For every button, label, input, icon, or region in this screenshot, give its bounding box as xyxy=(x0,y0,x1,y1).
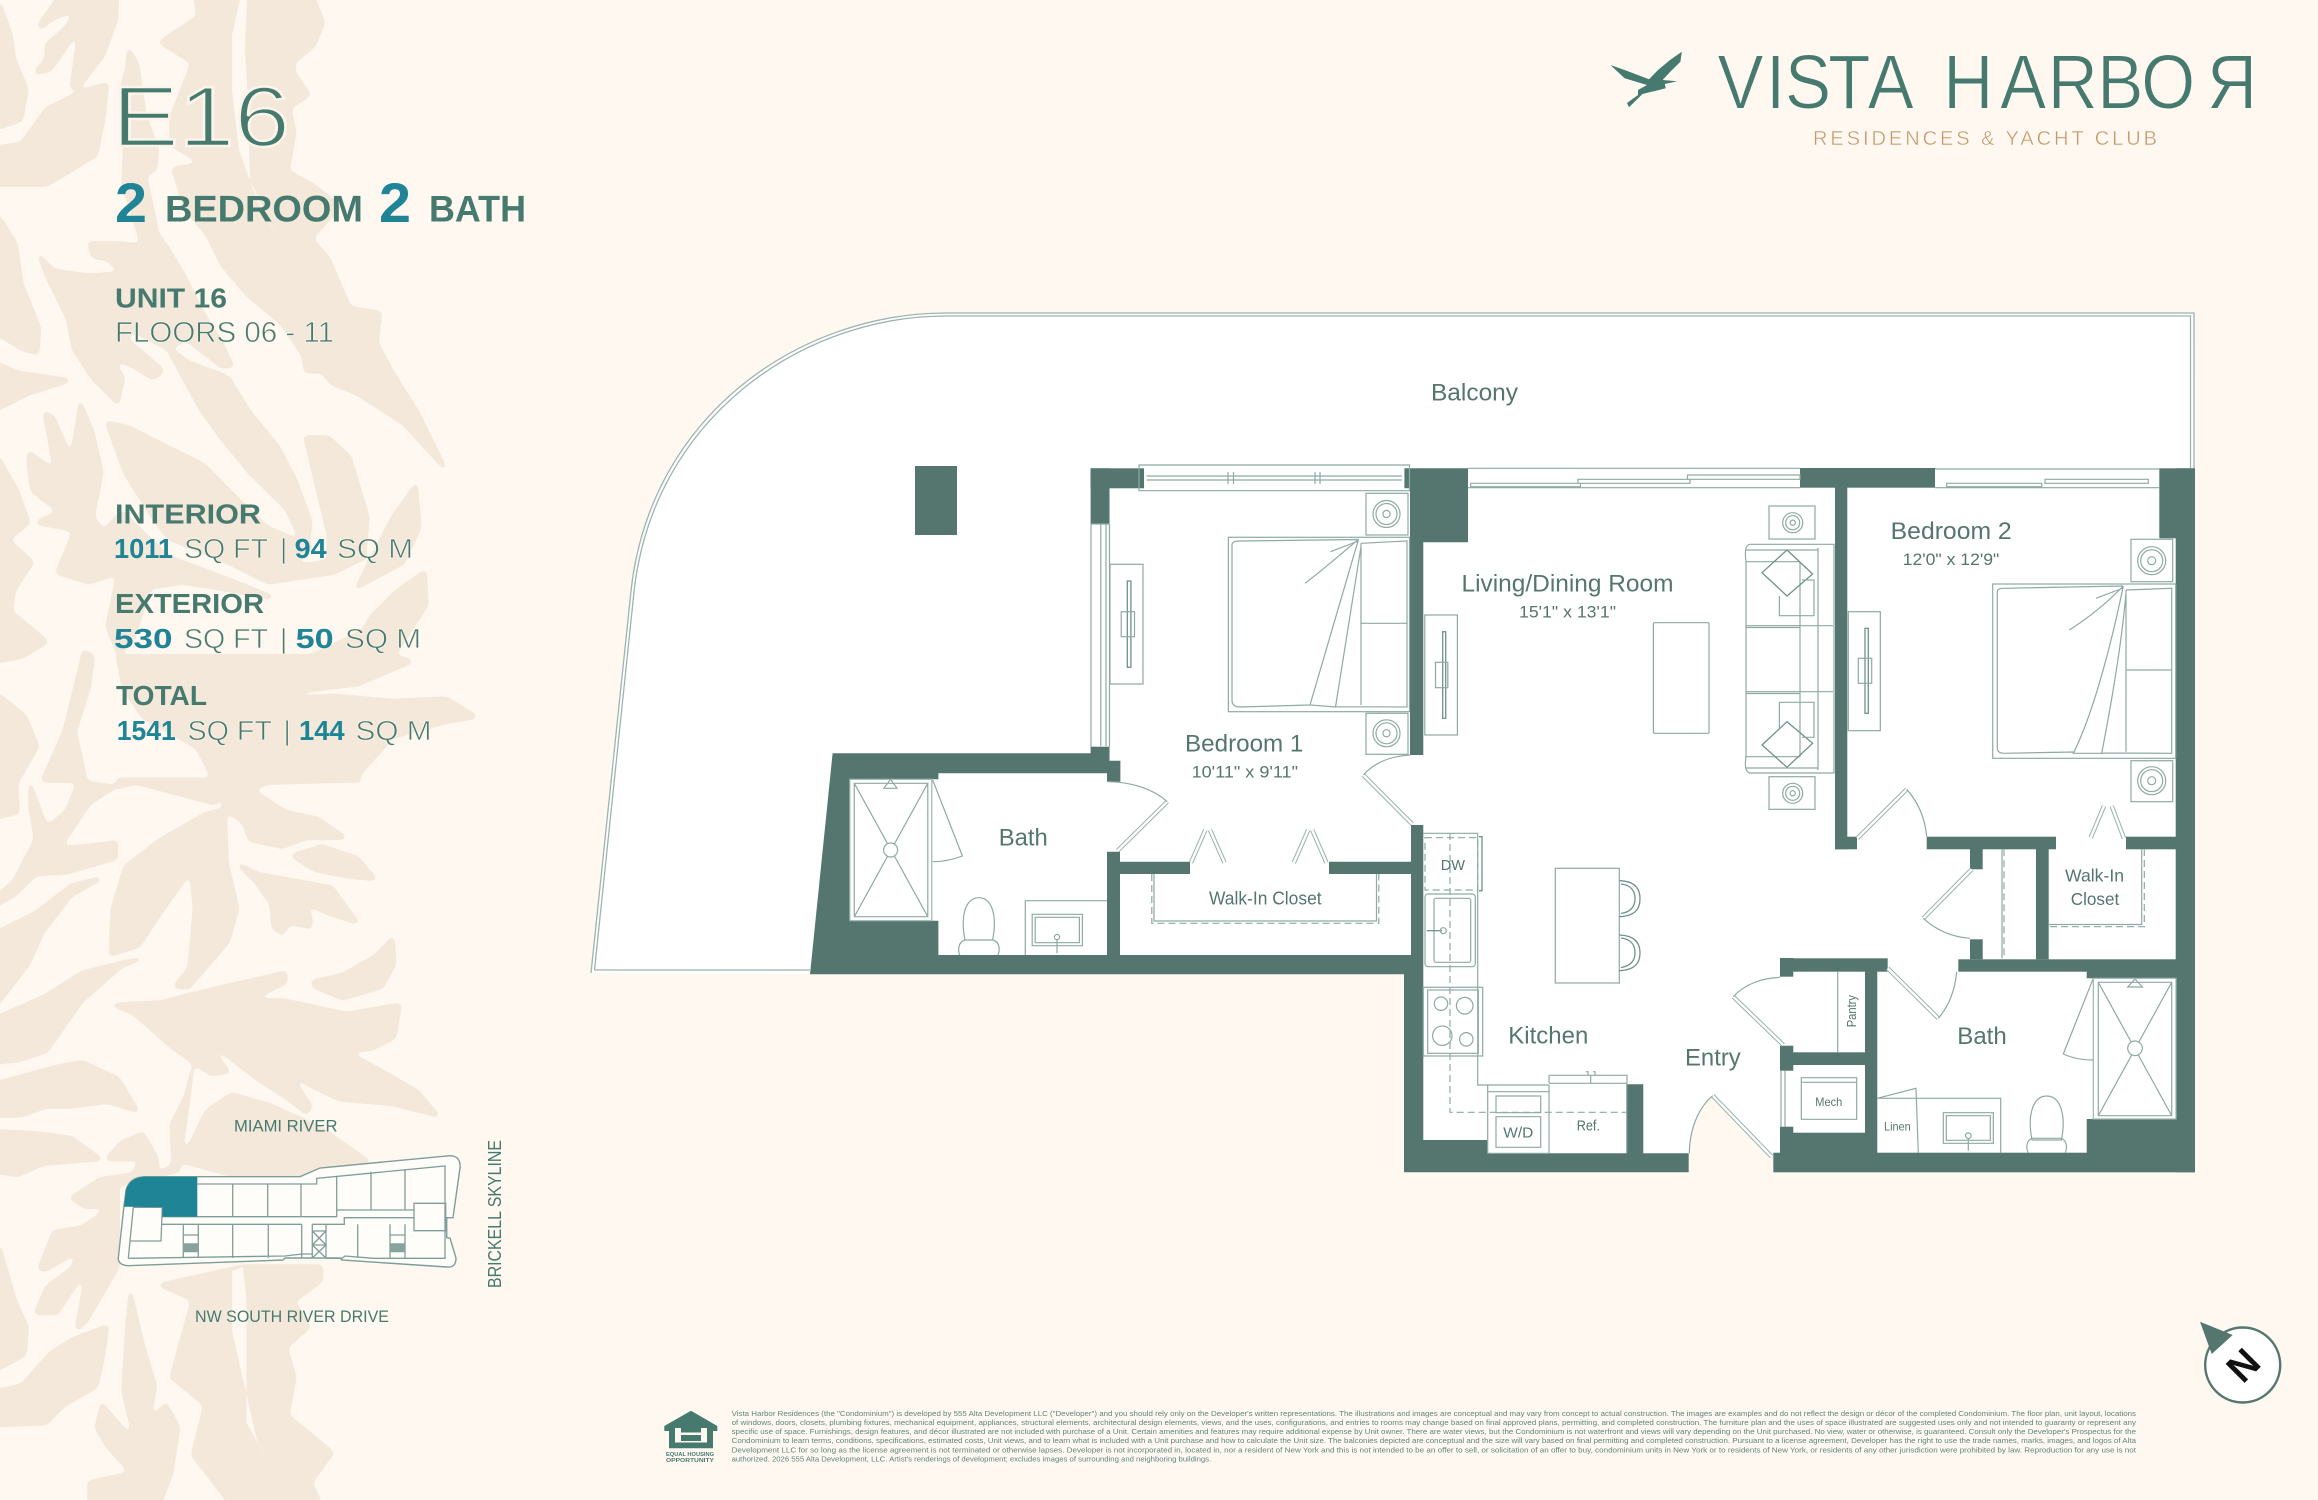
doors xyxy=(1108,755,2124,1157)
total area: 144 xyxy=(299,715,345,746)
highlighted unit xyxy=(124,1177,197,1217)
logo xyxy=(1610,39,2257,150)
unit title: E16 xyxy=(112,70,290,165)
room labels: Balcony xyxy=(1431,380,1518,406)
tv console xyxy=(1110,564,1143,684)
legal disclaimer: of windows, doors, closets, plumbing fixtures, mechanical equipment, appliances, structural elements, architectural design elements, views, and the uses, configurations, and entries to rooms may change based on final approved plans, permitting, and completed construction. The furniture plan and the uses of space illustrated are suggested uses only and not intended to guaranty or represent any xyxy=(732,1418,2136,1427)
range xyxy=(1423,987,1483,1056)
interior area: SQ M xyxy=(337,533,413,564)
tagline: RESIDENCES & YACHT CLUB xyxy=(1813,128,2157,150)
walls xyxy=(810,468,2195,1172)
room labels: Pantry xyxy=(1845,994,1859,1027)
exterior area: SQ FT xyxy=(184,623,268,654)
room labels: Living/Dining Room xyxy=(1462,571,1674,598)
icon: equal housing opportunity: OPPORTUNITY xyxy=(666,1458,714,1464)
washer dryer xyxy=(1488,1085,1549,1153)
label: Miami River: MIAMI RIVER xyxy=(234,1116,338,1135)
interior area: 94 xyxy=(295,533,327,564)
exterior area: SQ M xyxy=(345,623,421,654)
icon: equal housing opportunity: EQUAL HOUSING xyxy=(666,1452,714,1458)
toilet xyxy=(2027,1096,2066,1153)
kitchen fixtures xyxy=(1423,833,1640,1153)
shower xyxy=(850,779,962,921)
key plan with orientation labels xyxy=(118,1116,505,1326)
entry door threshold xyxy=(1689,1096,1773,1172)
nightstands and lamps xyxy=(1366,493,1408,754)
room labels: Closet xyxy=(2071,889,2119,909)
total area: 1541 xyxy=(117,715,176,746)
total area xyxy=(116,680,432,746)
legal disclaimer xyxy=(732,1409,2137,1464)
legal disclaimer: Development LLC for so long as the license agreement is not terminated or otherwise lapses. Developer is not incorporated in, located in, nor a resident of New York and this is not intended to be an offer to sell, or solicitation of an offer to buy, condominium units in New York or to residents of New York, or residents of any other jurisdiction were prohibited by law. Reproduction for any use is not xyxy=(732,1445,2136,1454)
floor plan xyxy=(591,313,2195,1172)
room labels: Mech xyxy=(1815,1095,1842,1109)
room labels: Entry xyxy=(1685,1045,1741,1072)
icon: equal housing opportunity xyxy=(664,1411,717,1464)
bedroom and bath count: 2 xyxy=(379,171,411,234)
island xyxy=(1555,868,1619,983)
exterior area: | xyxy=(280,623,287,654)
room labels: Bath xyxy=(999,825,1048,852)
icon: north compass: N xyxy=(2219,1341,2269,1391)
refrigerator xyxy=(1549,1072,1627,1153)
legal disclaimer: specific use of space. Furnishings, design features, and décor illustrated are not included with purchase of a Unit. Certain amenities and features may require additional expense by Unit owner. There are water views, but the Condominium is not waterfront and views will vary depending on the Unit purchased. No view, water or otherwise, is guaranteed. Consult only the Developer's Prospectus for the xyxy=(732,1427,2136,1436)
dishwasher handle xyxy=(1479,837,1482,891)
sink xyxy=(1425,894,1475,967)
interior area: | xyxy=(280,533,287,564)
room labels: Walk-In Closet xyxy=(1209,888,1322,908)
room labels: 12'0" x 12'9" xyxy=(1903,550,1999,569)
botanical leaf pattern xyxy=(0,0,475,1500)
interior area xyxy=(114,498,413,564)
unit number and floors: UNIT 16 xyxy=(115,282,227,314)
bed xyxy=(1993,584,2176,758)
stairs xyxy=(183,1243,405,1252)
balcony column xyxy=(915,466,957,535)
bedroom and bath count: 2 xyxy=(115,171,147,234)
total area: TOTAL xyxy=(116,680,207,711)
counter xyxy=(1423,833,1549,1085)
room labels: W/D xyxy=(1503,1124,1533,1141)
building rooms xyxy=(128,1166,446,1258)
room labels: Linen xyxy=(1884,1120,1911,1134)
label: NW South River Drive: NW SOUTH RIVER DRIVE xyxy=(195,1307,389,1326)
room labels: Walk-In xyxy=(2065,866,2124,886)
exterior area: 530 xyxy=(114,623,172,654)
room labels: Kitchen xyxy=(1508,1022,1588,1049)
room labels: Ref. xyxy=(1577,1118,1600,1135)
interior area: 1011 xyxy=(114,533,173,564)
tv console xyxy=(1848,612,1880,731)
wordmark: VISTA HARBOЯ xyxy=(1717,39,2257,125)
room labels: Bedroom 1 xyxy=(1185,731,1303,758)
shower xyxy=(2063,978,2176,1119)
dishwasher xyxy=(1425,838,1478,890)
walk-in closet two rod xyxy=(2004,849,2144,958)
upper cabinets outline xyxy=(1450,833,1627,1112)
tv console xyxy=(1425,615,1457,735)
label: Brickell Skyline: BRICKELL SKYLINE xyxy=(485,1140,505,1288)
legal disclaimer: Condominium to learn terms, conditions, specifications, estimated costs, Unit views, and to learn what is included with a Unit purchase and how to calculate the Unit size. The balconies depicted are conceptual and the size will vary based on final permitting and completed construction. Pursuant to a license agreement, Developer has the right to use the trade names, marks, images, and logos of Alta xyxy=(732,1436,2137,1445)
room labels: DW xyxy=(1441,857,1466,874)
walk-in closet one rod and shelf xyxy=(1152,874,1379,923)
pantry shelf and mechanical unit xyxy=(1801,972,1857,1119)
toilet xyxy=(959,898,999,955)
total area: SQ M xyxy=(356,715,432,746)
bathroom two fixtures xyxy=(1877,978,2176,1153)
bedroom two furniture xyxy=(1848,539,2176,802)
total area: | xyxy=(284,715,291,746)
room labels: Bath xyxy=(1957,1023,2007,1050)
legal disclaimer: Vista Harbor Residences (the "Condominium") is developed by 555 Alta Development LLC ("Developer") and you should rely only on the Developer's written representations. The illustrations and images are conceptual and may vary from concept to actual construction. The images are examples and do not reflect the design or décor of the completed Condominium. The floor plan, unit layout, locations xyxy=(732,1409,2136,1418)
total area: SQ FT xyxy=(188,715,272,746)
living room furniture xyxy=(1425,506,1834,809)
side tables xyxy=(1769,506,1815,809)
icon: heron in flight xyxy=(1610,52,1682,107)
bed xyxy=(1228,537,1410,712)
coffee table xyxy=(1653,623,1709,733)
nightstands and lamps xyxy=(2131,539,2173,802)
interior area: INTERIOR xyxy=(115,498,261,529)
sofa xyxy=(1745,544,1834,773)
room labels: Bedroom 2 xyxy=(1891,518,2012,545)
vanity xyxy=(1025,901,1107,955)
windows xyxy=(1091,465,2159,1127)
exterior area: EXTERIOR xyxy=(115,588,264,619)
unit number and floors xyxy=(115,282,334,349)
bedroom and bath count xyxy=(115,171,526,234)
exterior area: 50 xyxy=(296,623,334,654)
bedroom and bath count: BATH xyxy=(429,188,526,229)
balcony outline xyxy=(591,313,2194,973)
closet two solid shelf lines xyxy=(2002,849,2142,958)
icon: north compass xyxy=(2200,1322,2280,1402)
bedroom one furniture xyxy=(1110,493,1410,754)
room labels xyxy=(999,380,2124,1141)
bathroom one fixtures xyxy=(850,779,1107,955)
exterior area xyxy=(114,588,421,654)
bar stools xyxy=(1619,881,1640,971)
interior area: SQ FT xyxy=(184,533,268,564)
vanity and linen closet xyxy=(1877,1088,2001,1153)
building outline xyxy=(118,1156,460,1267)
room labels: 10'11" x 9'11" xyxy=(1192,762,1298,781)
unit number and floors: FLOORS 06 - 11 xyxy=(115,317,334,349)
bedroom and bath count: BEDROOM xyxy=(165,188,363,229)
leaf vein cut-outs xyxy=(232,0,275,1473)
legal disclaimer: authorized. 2026 555 Alta Development, LLC. Artist's renderings of development; excludes images of surrounding and neighboring buildings. xyxy=(732,1454,1211,1464)
balcony and unit floor xyxy=(591,313,2195,1172)
room labels: 15'1" x 13'1" xyxy=(1519,602,1616,621)
